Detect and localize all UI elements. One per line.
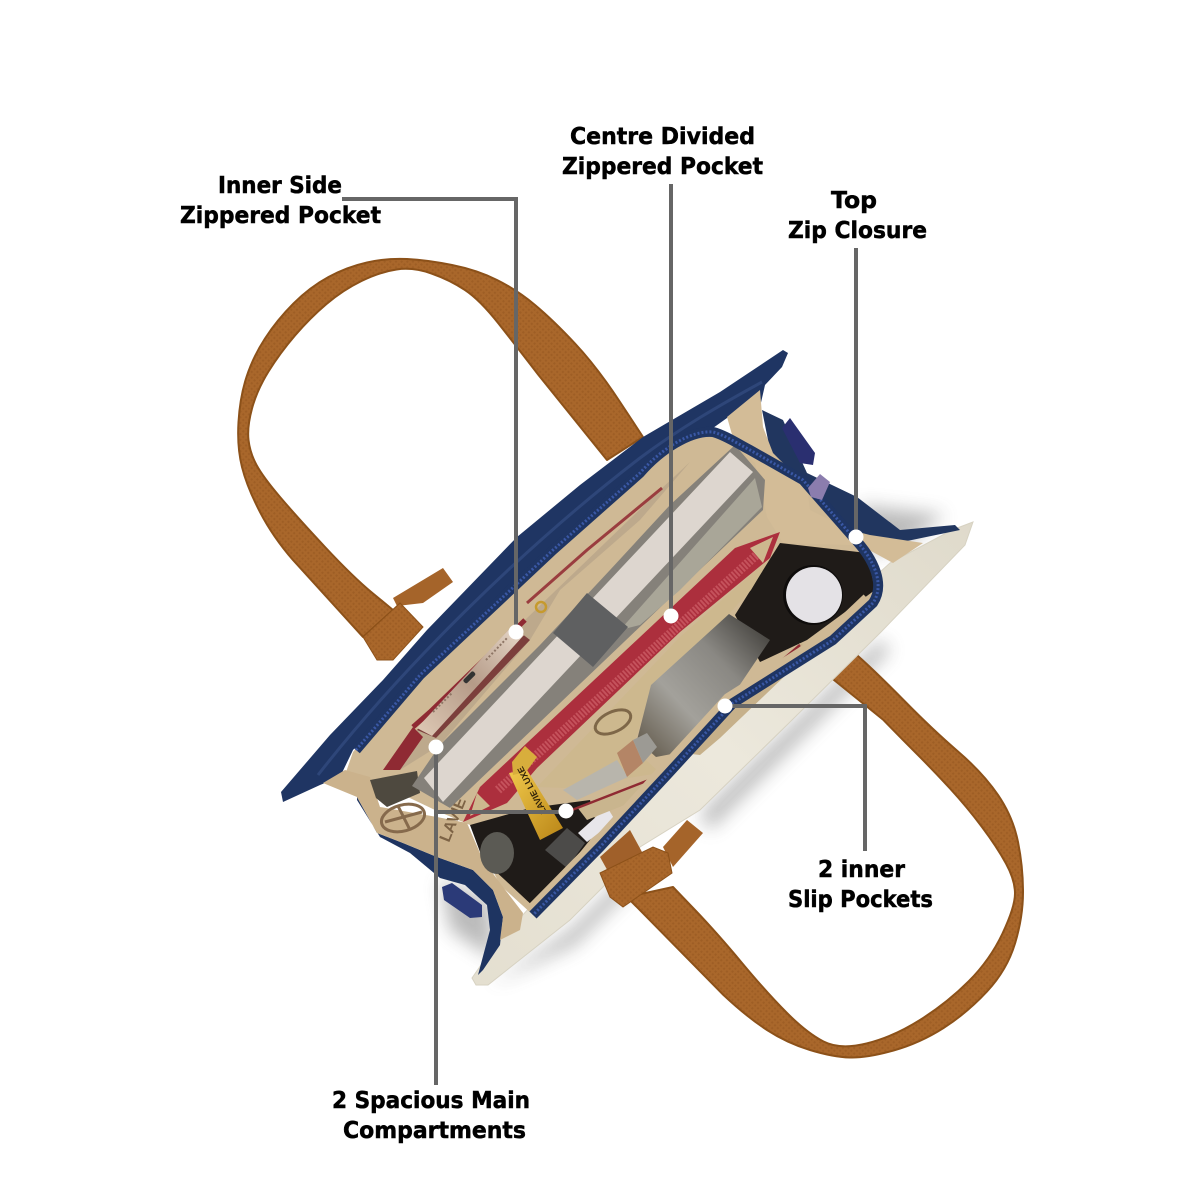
callout: 2 inner slip pockets: Slip Pockets [788, 887, 933, 913]
strap: front handle [627, 640, 1023, 1058]
front compartment dark bases [470, 543, 875, 908]
callout: 2 spacious main compartments: Compartments [343, 1118, 526, 1144]
callout: 2 inner slip pockets [718, 698, 933, 913]
interior: left gusset with logo [323, 770, 523, 940]
bag: cream front panel [472, 522, 973, 985]
notebook [412, 445, 765, 808]
copper tube [617, 740, 643, 777]
dark area at lower end [470, 800, 598, 908]
navy back flap highlight [318, 382, 762, 775]
callout: inner side zippered pocket [180, 173, 524, 640]
gold zip ring [536, 602, 546, 612]
callout: 2 spacious main compartments: 2 Spacious Main [332, 1088, 530, 1114]
bag: beige interior lining [345, 432, 875, 915]
gold zipper pull tag: LAVIE LUXE [515, 765, 549, 816]
strap: back handle [238, 259, 643, 637]
item: bottle lid [783, 565, 843, 625]
pouch back and logo [537, 558, 770, 788]
brand text on lining: LAVIE [549, 525, 581, 554]
callout: centre divided zippered pocket: Centre Divided [570, 124, 755, 150]
strap: left knot tab [363, 568, 453, 660]
callout: centre divided zippered pocket [562, 124, 763, 624]
gold zipper pull tag [509, 746, 563, 840]
buckle tab: right [782, 418, 815, 465]
grey cube [545, 828, 585, 868]
item: phone in side pocket [417, 602, 546, 738]
callout: top zip closure: Top [831, 188, 877, 214]
callout: 2 spacious main compartments [332, 740, 574, 1144]
callout: top zip closure: Zip Closure [788, 218, 927, 244]
interior: right gusset [727, 390, 923, 563]
callout: top zip closure [788, 188, 927, 544]
dark area around bottle [735, 543, 875, 662]
lining monogram [378, 800, 428, 836]
white cube [578, 807, 615, 842]
strap: lower knot over front panel [600, 820, 703, 907]
buckle tab: left [442, 883, 482, 918]
purple zip puller [808, 474, 830, 500]
item: silver container [637, 614, 770, 757]
navy back flap [281, 350, 788, 802]
round grey cap [480, 832, 514, 874]
callout: inner side zippered pocket: Zippered Pocket [180, 203, 381, 229]
bag shadows [440, 505, 945, 985]
silver cap [633, 733, 657, 763]
top zip closure: zipper around opening [356, 432, 878, 915]
item: grey elastic band [553, 593, 628, 667]
callout: 2 inner slip pockets: 2 inner [818, 857, 906, 883]
lower slip pocket [572, 773, 667, 820]
bag: navy outer shell [281, 350, 960, 975]
lining brand text: LAVIE [437, 795, 470, 844]
right slip pocket [683, 643, 812, 755]
callout: centre divided zippered pocket: Zippered Pocket [562, 154, 763, 180]
lower compartment contents [480, 733, 657, 874]
callout: inner side zippered pocket: Inner Side [218, 173, 342, 199]
front inner lining band [530, 597, 866, 908]
interior: rear slip pocket [383, 462, 690, 770]
barcode box [563, 760, 628, 800]
navy right gusset [762, 410, 960, 545]
red zipper pouch [463, 532, 780, 822]
dark corner shadow [370, 771, 420, 807]
navy left gusset [357, 797, 503, 975]
